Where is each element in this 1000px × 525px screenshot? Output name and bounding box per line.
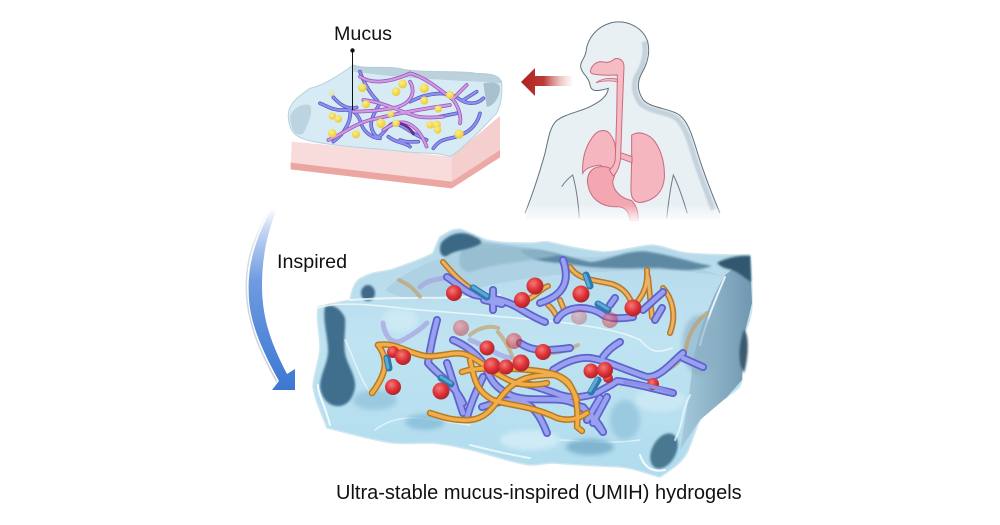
panel: UMIH hydrogel block <box>313 229 752 477</box>
bronchus <box>620 153 632 163</box>
front strand over spheres <box>625 382 673 393</box>
body silhouette <box>525 22 722 220</box>
arrow: blue curved "Inspired" <box>246 208 295 390</box>
pale and blue gel patches <box>353 308 718 455</box>
caption: Ultra-stable mucus-inspired (UMIH) hydrogels <box>336 482 742 504</box>
top face <box>385 248 725 299</box>
small cavity <box>361 285 375 301</box>
left dark cavity <box>320 305 355 406</box>
mucin strands <box>320 72 483 148</box>
mucus gel layer <box>288 65 502 157</box>
leader line: Mucus <box>350 48 355 110</box>
panel: mucus layer block <box>288 65 502 188</box>
lungs <box>583 130 664 203</box>
right side face <box>680 256 752 450</box>
label: Mucus: Mucus <box>334 23 392 45</box>
yellow particles <box>328 80 464 139</box>
red spheres <box>385 278 659 400</box>
blue connectors <box>386 275 608 392</box>
top dark cavity <box>440 233 481 256</box>
airway and esophagus <box>590 59 624 176</box>
polymer strands, purple <box>428 260 703 433</box>
fade under body <box>510 205 730 223</box>
arrow: red, body to mucus <box>521 68 572 96</box>
tongue <box>596 78 617 83</box>
label: Inspired: Inspired <box>277 251 347 273</box>
glass highlights <box>318 277 725 471</box>
panel: human body with airway and digestive tract <box>525 22 722 221</box>
polymer strands, back layer <box>383 262 707 377</box>
gel body <box>313 229 752 477</box>
pink tissue base <box>291 116 500 188</box>
stomach and intestine <box>587 167 638 221</box>
polymer strands, orange <box>372 344 587 431</box>
bottom right cavity <box>644 429 684 473</box>
